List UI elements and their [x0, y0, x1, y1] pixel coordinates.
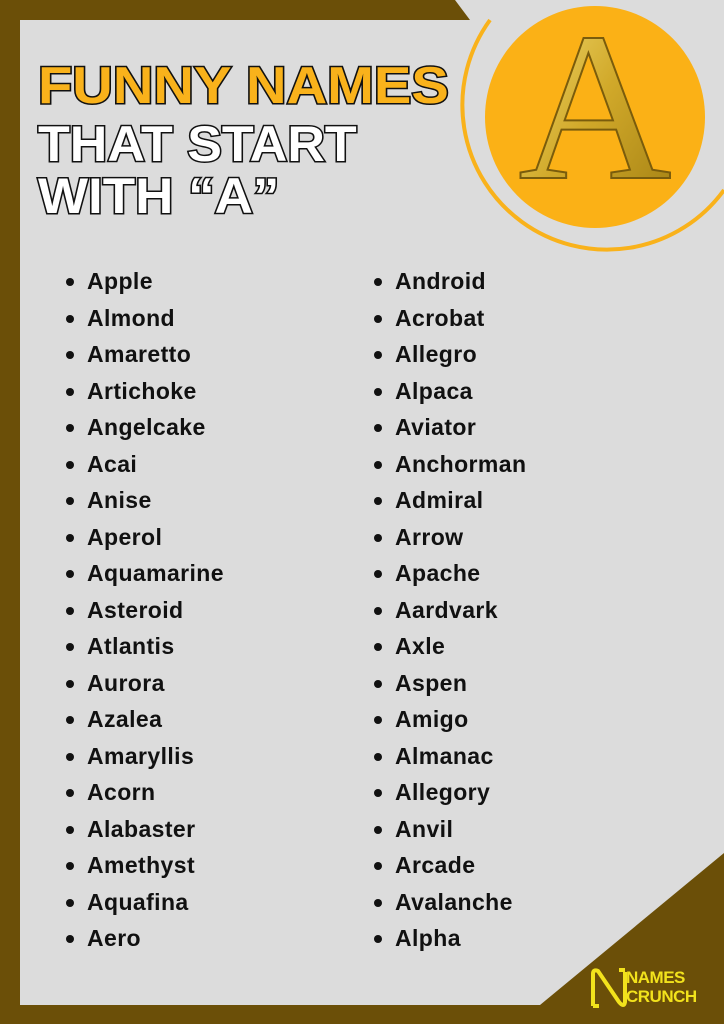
- logo: [591, 968, 697, 1008]
- list: column 1: Amaryllis: [87, 742, 194, 768]
- list: column 2: Allegory: [395, 779, 490, 805]
- list: column 2: Axle: [395, 633, 445, 659]
- list: column 2: Admiral: [395, 487, 483, 513]
- list: column 2: Android: [395, 268, 486, 294]
- list: column 1: Alabaster: [87, 816, 195, 842]
- list: column 1: Apple: [87, 268, 153, 294]
- list: column 2: Amigo: [395, 706, 469, 732]
- logo: NAMES: [626, 968, 685, 987]
- list: column 2: Almanac: [395, 742, 494, 768]
- list: column 2: Aspen: [395, 670, 467, 696]
- list: column 2: Anvil: [395, 816, 453, 842]
- list: column 1: Aquamarine: [87, 560, 224, 586]
- list: column 2: Aviator: [395, 414, 476, 440]
- list: column 1: Asteroid: [87, 596, 184, 622]
- list: column 1: Acorn: [87, 779, 155, 805]
- title: FUNNY NAMES: [38, 57, 449, 115]
- list: column 2: Arcade: [395, 852, 475, 878]
- list: column 2: Alpha: [395, 925, 461, 951]
- list: column 1: Aquafina: [87, 888, 189, 914]
- list: column 2: Arrow: [395, 524, 463, 550]
- list: column 2: Apache: [395, 560, 480, 586]
- list: column 1: Azalea: [87, 706, 162, 732]
- list: column 2: Allegro: [395, 341, 477, 367]
- list: column 2: Acrobat: [395, 304, 485, 330]
- list: column 2: Avalanche: [395, 888, 513, 914]
- list: column 1: Aurora: [87, 670, 165, 696]
- outer ring: [462, 20, 724, 250]
- list: column 1: Amaretto: [87, 341, 191, 367]
- list: column 1: Anise: [87, 487, 152, 513]
- title: THAT START: [38, 116, 357, 172]
- list: column 2: [374, 268, 526, 951]
- title: WITH “A”: [38, 168, 279, 224]
- list: column 1: Almond: [87, 304, 175, 330]
- list: column 1: Acai: [87, 450, 137, 476]
- list: column 2: Alpaca: [395, 378, 473, 404]
- list: column 1: Atlantis: [87, 633, 175, 659]
- list: column 1: Aero: [87, 925, 141, 951]
- logo: CRUNCH: [626, 987, 697, 1006]
- list: column 1: Aperol: [87, 524, 162, 550]
- icon: letter A circle: [485, 6, 705, 228]
- title: [36, 57, 449, 224]
- list: column 2: Anchorman: [395, 450, 526, 476]
- list: column 1: Artichoke: [87, 378, 197, 404]
- list: column 1: Amethyst: [87, 852, 195, 878]
- list: column 2: Aardvark: [395, 596, 498, 622]
- list: column 1: Angelcake: [87, 414, 206, 440]
- list: column 1: [66, 268, 224, 951]
